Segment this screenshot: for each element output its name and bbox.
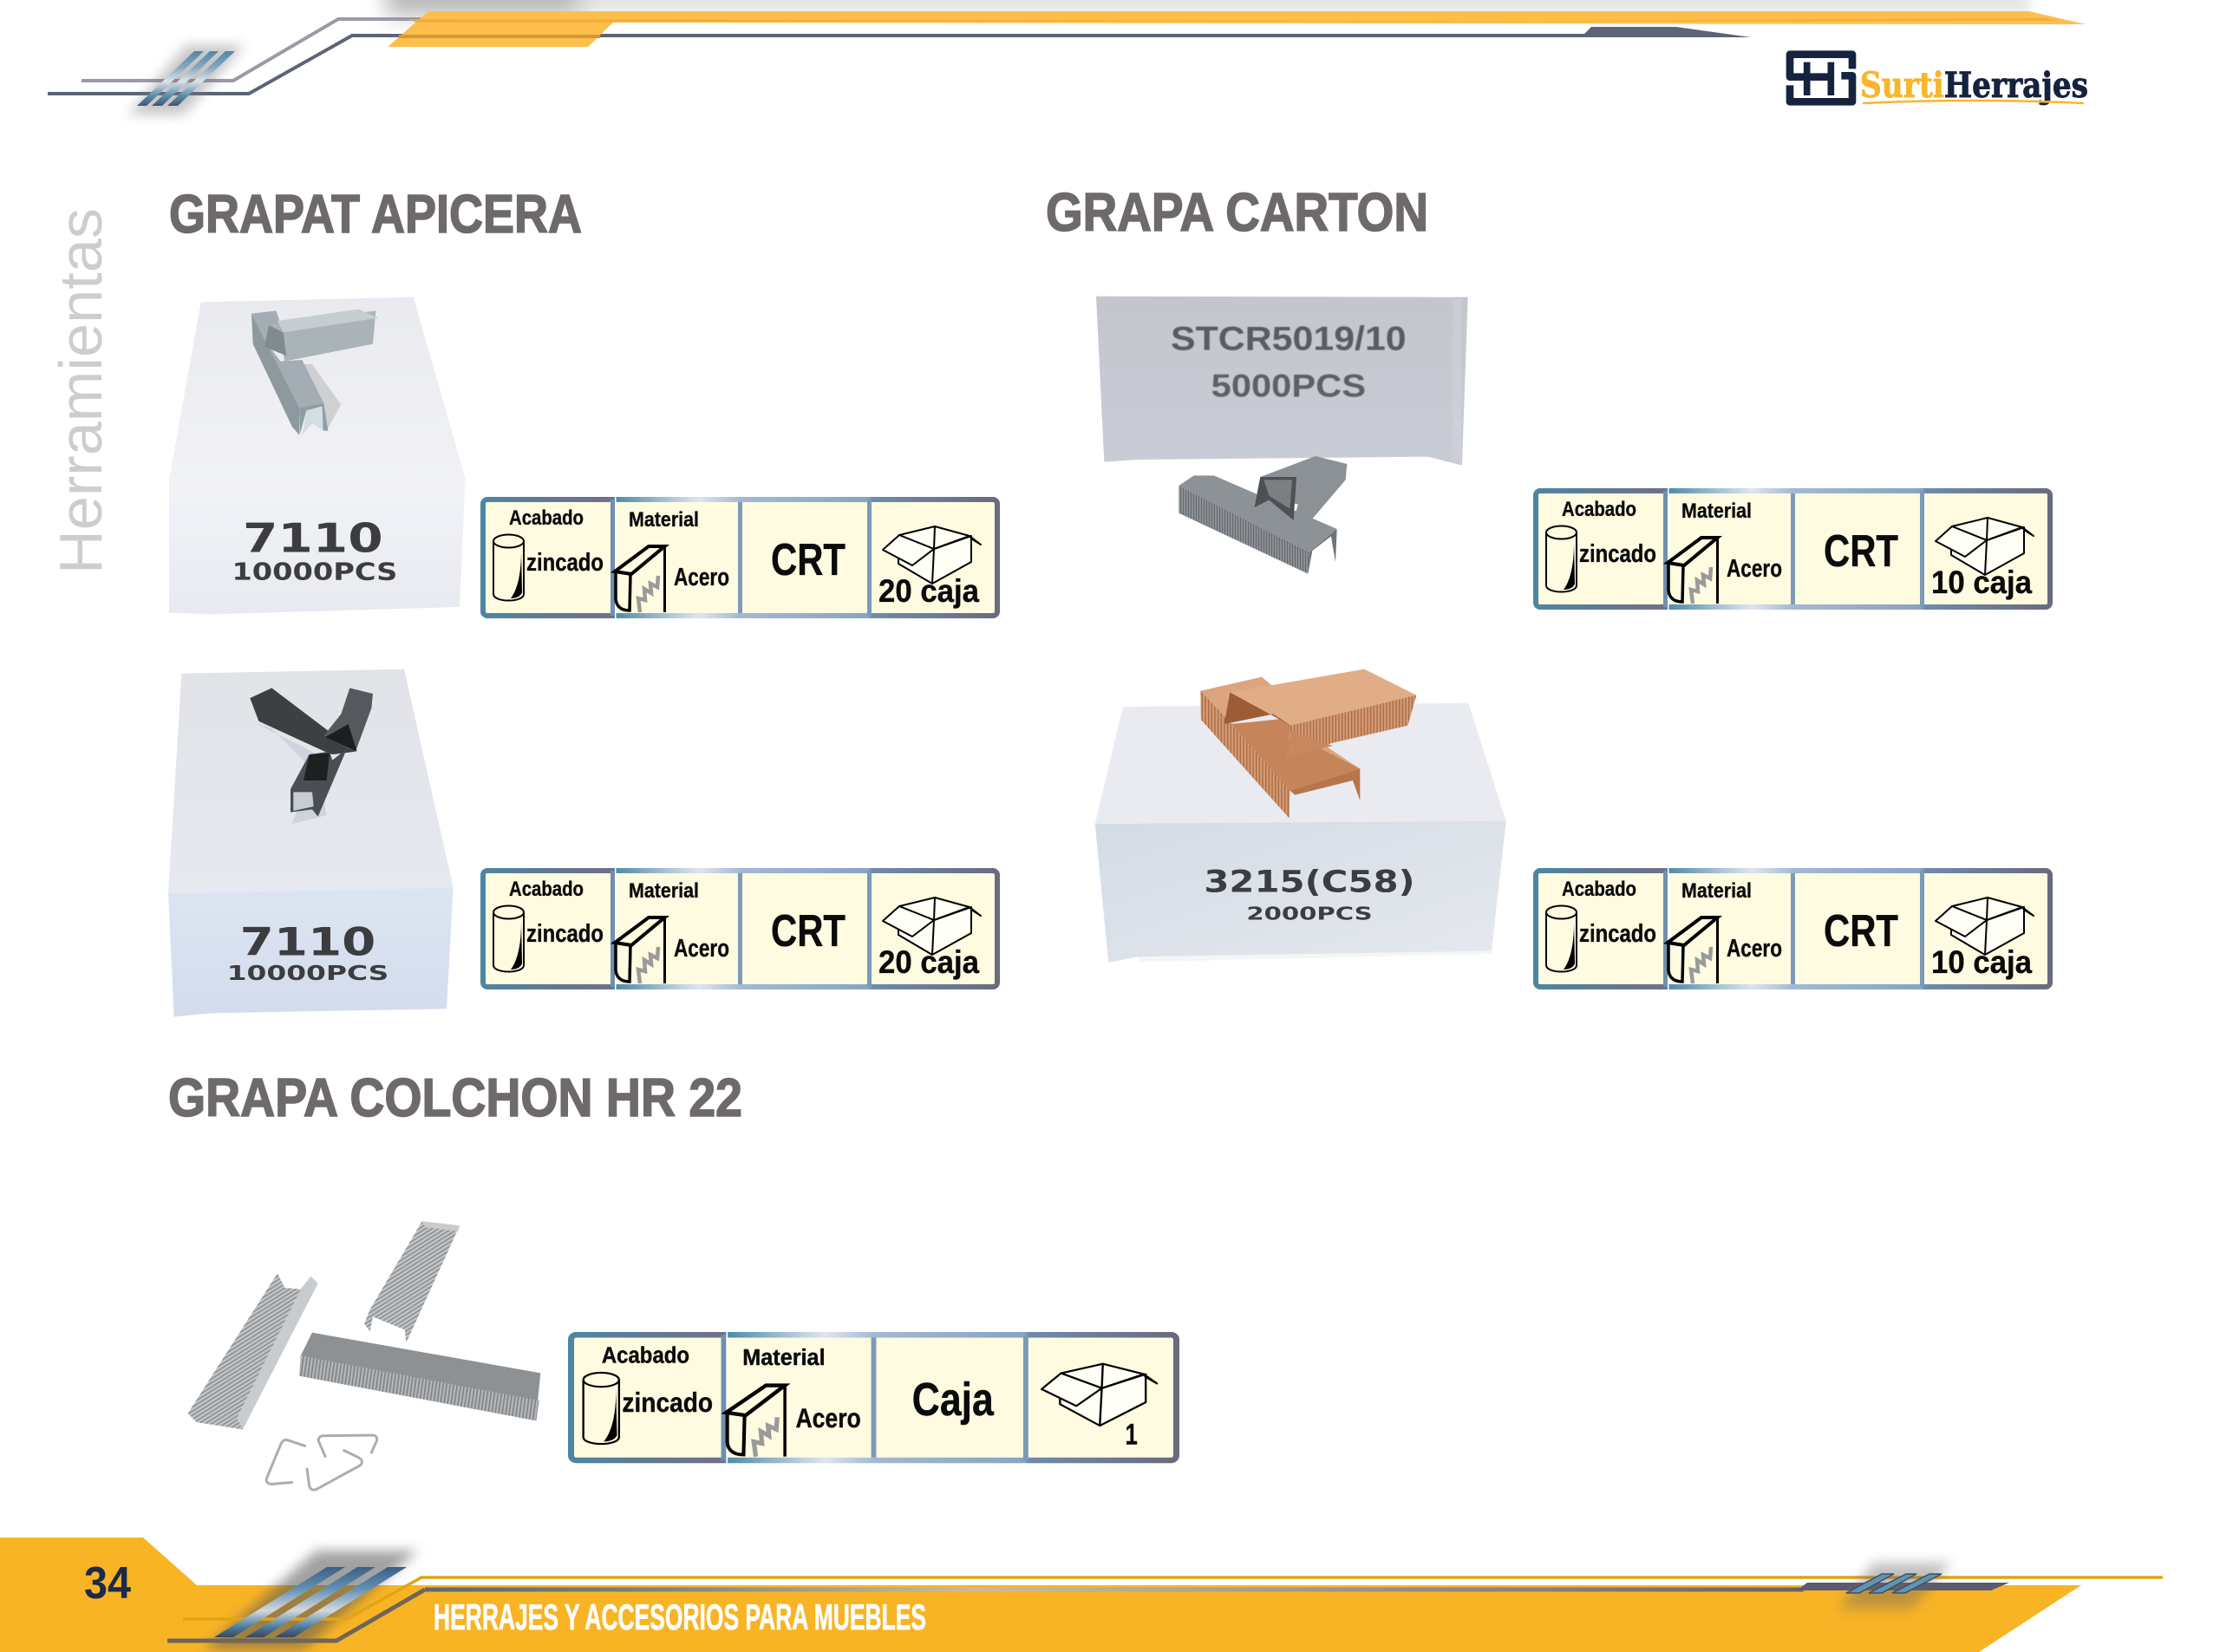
photo: box 7110 dark staples [168,669,454,1017]
spec panel 2 [483,868,997,989]
heading: grapa tapicera: GRAPAT APICERA [169,185,582,245]
spec panel 3: Acero [1727,555,1782,583]
photo: box STCR5019/10 carton staples: STCR5019/10 [1171,320,1407,357]
top decorative band [48,0,2086,114]
photo: box 7110 galvanized staples [169,297,466,614]
spec panel 3: 10 caja [1931,565,2032,600]
page number: 34 [84,1558,131,1609]
spec panel 4: zincado [1579,920,1656,948]
photo: box 7110 galvanized staples: 7110 [243,516,383,563]
spec panel 2: CRT [771,906,846,957]
spec panel 3: Material [1681,500,1752,523]
side label: Herramientas [47,208,114,574]
spec panel 4: Material [1681,879,1752,903]
spec panel 3: zincado [1579,540,1656,568]
spec panel 2: 20 caja [878,944,979,980]
photo: mattress clip staples [188,1221,540,1490]
spec panel 5 [571,1332,1176,1463]
logo wordmark: SurtiHerrajes [1860,65,2088,106]
photo: box STCR5019/10 carton staples [1096,297,1468,574]
spec panel 3: CRT [1824,526,1898,577]
spec panel 5: Material [742,1344,826,1370]
heading: grapa carton: GRAPA CARTON [1046,183,1428,243]
photo: box 3215(C58) copper staples: 3215(C58) [1204,865,1415,899]
spec panel 5: 1 [1126,1417,1138,1451]
spec panel 3: Acabado [1562,498,1636,521]
photo: box STCR5019/10 carton staples: 5000PCS [1211,367,1366,403]
spec panel 1: zincado [526,549,604,577]
logo mark [1790,55,1852,101]
spec panel 1: 20 caja [878,573,979,609]
spec panel 2: Acabado [509,878,584,901]
footer band [0,1538,2163,1652]
spec panel 5: Acero [795,1402,861,1433]
spec panel 5: Caja [912,1373,994,1426]
spec panel 1: CRT [771,535,846,585]
photo: box 7110 dark staples: 7110 [240,920,375,965]
heading: grapa colchon: GRAPA COLCHON HR 22 [168,1068,742,1128]
spec panel 3 [1536,488,2050,610]
spec panel 5: Acabado [602,1342,689,1368]
footer title: HERRAJES Y ACCESORIOS PARA MUEBLES [434,1596,926,1637]
spec panel 4: 10 caja [1931,944,2032,980]
photo: box 7110 dark staples: 10000PCS [227,961,388,985]
spec panel 5: zincado [622,1387,713,1417]
spec panel 4: Acabado [1562,878,1636,901]
spec panel 4 [1536,868,2050,989]
photo: box 7110 galvanized staples: 10000PCS [232,557,397,585]
spec panel 2: Acero [674,935,729,963]
spec panel 1: Acero [674,564,729,591]
photo: box 3215(C58) copper staples: 2000PCS [1246,904,1373,924]
photo: box 3215(C58) copper staples [1095,669,1506,963]
spec panel 1: Acabado [509,506,584,530]
spec panel 2: zincado [526,920,604,948]
logo: SurtiHerrajes [1790,55,2088,106]
spec panel 4: Acero [1727,935,1782,963]
spec panel 2: Material [629,879,699,903]
spec panel 4: CRT [1824,906,1898,957]
spec panel 1: Material [629,508,699,532]
spec panel 1 [483,497,997,618]
